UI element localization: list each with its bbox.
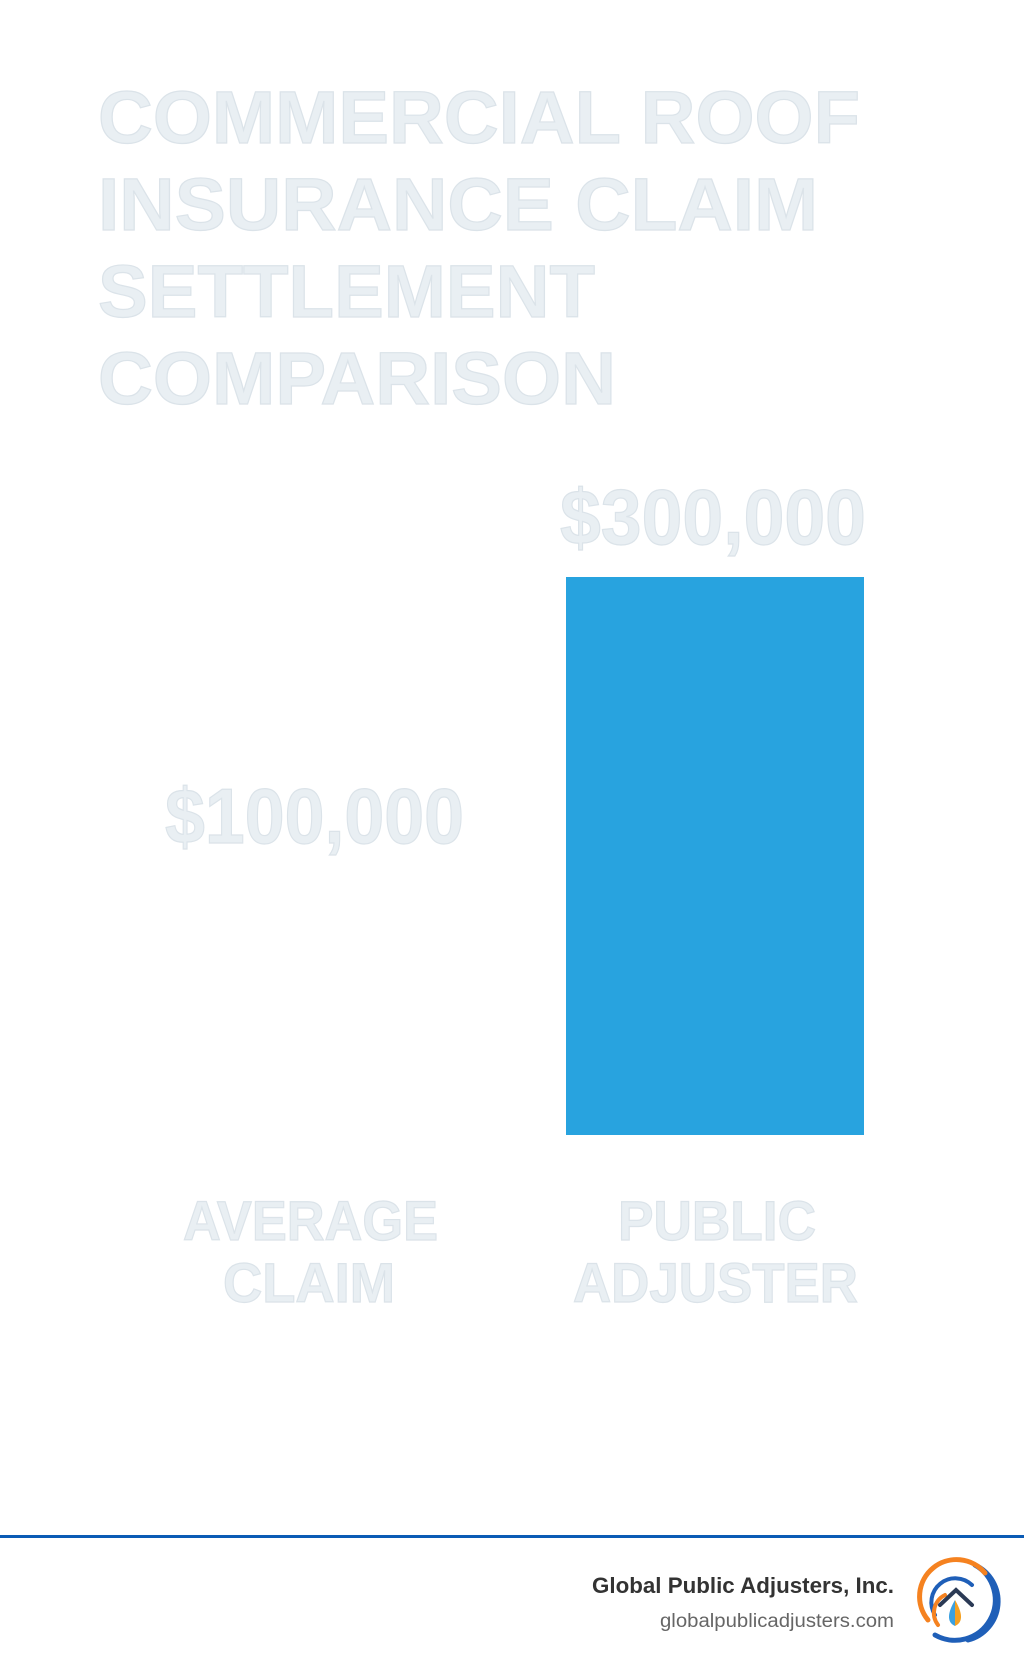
footer company name: Global Public Adjusters, Inc.	[592, 1573, 894, 1598]
bar: public adjuster	[566, 577, 864, 1135]
category label: public adjuster: PUBLIC	[618, 1189, 816, 1252]
category label: public adjuster	[573, 1189, 858, 1314]
value label: public adjuster: $300,000	[560, 473, 866, 561]
icon: logo	[920, 1560, 998, 1640]
value label: average claim: $100,000	[165, 772, 464, 860]
title: INSURANCE CLAIM	[98, 163, 818, 246]
bar chart	[165, 473, 866, 1314]
title: COMPARISON	[98, 337, 616, 420]
category label: average claim	[183, 1189, 438, 1314]
category label: average claim: CLAIM	[223, 1251, 395, 1314]
title: COMMERCIAL ROOF	[98, 76, 860, 159]
category label: public adjuster: ADJUSTER	[573, 1251, 858, 1314]
footer url: globalpublicadjusters.com	[660, 1611, 894, 1632]
category label: average claim: AVERAGE	[183, 1189, 438, 1252]
title	[98, 76, 860, 420]
title: SETTLEMENT	[98, 250, 595, 333]
